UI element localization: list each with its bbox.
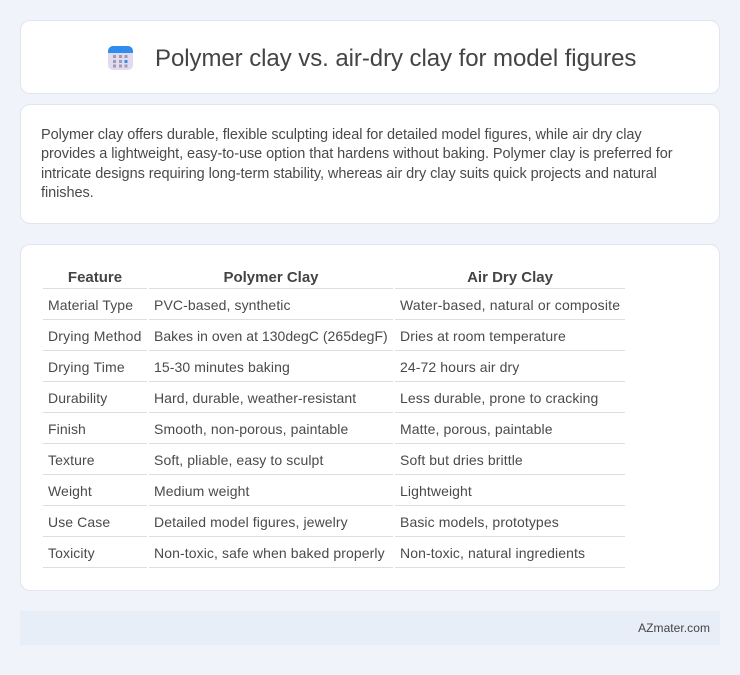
row: Drying Time: Drying Time (48, 359, 125, 375)
row: Drying Time: 24-72 hours air dry (400, 359, 519, 375)
row: Material Type: Water-based, natural or composite (400, 297, 620, 313)
row: Toxicity: Non-toxic, safe when baked properly (154, 545, 385, 561)
row: Texture: Soft, pliable, easy to sculpt (154, 452, 323, 468)
row: Finish: Smooth, non-porous, paintable (154, 421, 348, 437)
row: Texture: Soft but dries brittle (400, 452, 523, 468)
row: Drying Method (43, 328, 625, 351)
row: Drying Method: Dries at room temperature (400, 328, 566, 344)
row: Use Case: Basic models, prototypes (400, 514, 559, 530)
table header: Polymer Clay (223, 269, 319, 286)
row: Weight: Medium weight (154, 483, 249, 499)
row: Weight: Weight (48, 483, 92, 499)
title: Polymer clay vs. air-dry clay for model figures (155, 45, 636, 72)
row: Durability: Less durable, prone to cracking (400, 390, 598, 406)
row: Durability: Durability (48, 390, 107, 406)
row: Texture (43, 452, 625, 475)
row: Toxicity: Toxicity (48, 545, 95, 561)
row: Finish (43, 421, 625, 444)
row: Use Case (43, 514, 625, 537)
footer credit: AZmater.com (638, 621, 710, 635)
row: Toxicity: Non-toxic, natural ingredients (400, 545, 585, 561)
row: Weight (43, 483, 625, 506)
footer bar (20, 611, 720, 645)
row: Toxicity (43, 545, 625, 568)
row: Durability: Hard, durable, weather-resistant (154, 390, 356, 406)
row: Drying Method: Drying Method (48, 328, 142, 344)
row: Finish: Matte, porous, paintable (400, 421, 553, 437)
row: Material Type: PVC-based, synthetic (154, 297, 291, 313)
intro paragraph: finishes. (41, 185, 94, 201)
intro paragraph: intricate designs requiring long-term stability, whereas air dry clay suits quick projects and natural (41, 166, 657, 182)
table header: Feature (68, 269, 122, 286)
intro paragraph: provides a lightweight, easy-to-use option that hardens without baking. Polymer clay is preferred for (41, 146, 672, 162)
row: Texture: Texture (48, 452, 95, 468)
row: Finish: Finish (48, 421, 86, 437)
row: Use Case: Detailed model figures, jewelry (154, 514, 348, 530)
row: Drying Time (43, 359, 625, 382)
intro paragraph: Polymer clay offers durable, flexible sculpting ideal for detailed model figures, while air dry clay (41, 127, 642, 143)
table header: Air Dry Clay (467, 269, 553, 286)
row: Drying Time: 15-30 minutes baking (154, 359, 290, 375)
row: Material Type (43, 297, 625, 320)
intro paragraph (41, 127, 672, 201)
table header (43, 269, 625, 289)
intro text panel (20, 104, 720, 224)
row: Durability (43, 390, 625, 413)
row: Use Case: Use Case (48, 514, 110, 530)
title card (20, 20, 720, 94)
comparison table panel (20, 244, 720, 591)
icon: calendar (108, 46, 133, 70)
row: Drying Method: Bakes in oven at 130degC (265degF) (154, 328, 388, 344)
row: Weight: Lightweight (400, 483, 472, 499)
row: Material Type: Material Type (48, 297, 133, 313)
